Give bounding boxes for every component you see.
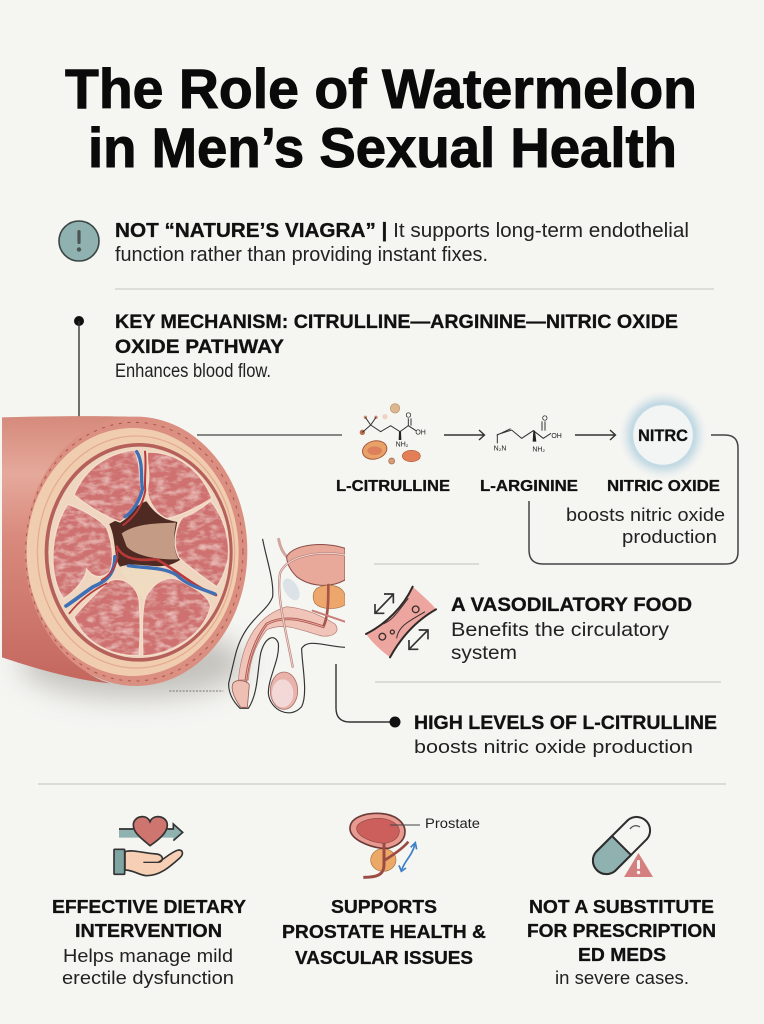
molecule labels: [336, 478, 720, 495]
text block: vasodilatory food: system: [451, 642, 517, 664]
text block: not nature's viagra: function rather than providing instant fixes.: [115, 244, 488, 266]
glans: [232, 681, 249, 707]
text block: not a substitute: [527, 896, 716, 988]
fibre layer: [37, 436, 235, 668]
text block: key mechanism: Enhances blood flow.: [115, 360, 271, 382]
text block: prostate health: SUPPORTS: [331, 896, 437, 917]
cylinder body: [2, 416, 143, 683]
icon: prostate: [350, 813, 480, 877]
text block: effective dietary intervention: Helps manage mild: [63, 945, 233, 966]
molecule labels: L-CITRULLINE: [336, 478, 450, 495]
molecule: L-citrulline: [360, 402, 426, 464]
text block: effective dietary intervention: EFFECTIVE DIETARY: [52, 896, 247, 917]
text block: key mechanism: OXIDE PATHWAY: [115, 336, 284, 358]
title: The Role of Watermelon: [65, 57, 697, 120]
body outline: [229, 539, 345, 713]
blood vessels: [66, 452, 216, 613]
molecule labels: NITRIC OXIDE: [607, 478, 720, 495]
connector: cross section to molecules: [197, 434, 342, 436]
title: in Men’s Sexual Health: [88, 116, 677, 179]
dashed rim marks: [26, 422, 243, 681]
molecule labels: L-ARGININE: [480, 478, 578, 495]
shadow: [20, 628, 247, 698]
connector: key mechanism to cross section: [74, 316, 84, 418]
pubic bone: [283, 578, 300, 600]
text block: boosts nitric oxide production: boosts nitric oxide: [566, 505, 725, 525]
pale layer: [27, 428, 239, 676]
text block: not nature's viagra: [115, 220, 689, 266]
molecule: L-citrulline: NH₂: [396, 442, 409, 449]
text block: not a substitute: in severe cases.: [555, 967, 689, 988]
molecule: L-arginine: NH₂: [532, 446, 545, 453]
vas deferens: [279, 553, 345, 667]
text block: vasodilatory food: A VASODILATORY FOOD: [451, 594, 692, 616]
outer wall: [25, 417, 247, 686]
inner membrane: [48, 447, 230, 658]
text block: high levels of l-citrulline: [414, 712, 717, 757]
illustration: tissue cross section: [2, 416, 247, 698]
text block: effective dietary intervention: erectile dysfunction: [62, 967, 234, 988]
text block: prostate health: PROSTATE HEALTH &: [282, 921, 486, 942]
icon: prostate: Prostate: [425, 816, 480, 831]
icon: exclamation alert: [59, 221, 99, 261]
rectum stripes: [313, 611, 345, 622]
illustration: male anatomy diagram: [169, 539, 345, 713]
dotted pointer: [169, 690, 223, 692]
text block: prostate health: [282, 896, 486, 968]
dark ring: [45, 443, 233, 662]
text block: boosts nitric oxide production: [566, 505, 725, 547]
urethra: [244, 585, 328, 707]
central cavity: [109, 502, 180, 567]
icon: nitric oxide glow: [619, 391, 707, 479]
text block: effective dietary intervention: [52, 896, 247, 988]
arrow: arginine to nitric oxide: [575, 430, 616, 440]
ureter: [279, 539, 287, 557]
shaft: [238, 607, 337, 680]
text block: prostate health: VASCULAR ISSUES: [295, 947, 473, 968]
text block: not a substitute: NOT A SUBSTITUTE: [529, 896, 714, 917]
molecule: L-arginine: N₂N: [494, 446, 506, 453]
text block: boosts nitric oxide production: production: [622, 527, 717, 547]
text block: effective dietary intervention: INTERVENTION: [75, 920, 222, 941]
text block: high levels of l-citrulline: boosts nitric oxide production: [414, 736, 693, 757]
icon: pill with warning: [593, 817, 653, 877]
text block: vasodilatory food: [451, 594, 692, 664]
bladder: [287, 545, 345, 585]
molecule: L-arginine: [494, 414, 562, 453]
molecule: L-citrulline: O: [406, 410, 412, 419]
text block: key mechanism: KEY MECHANISM: CITRULLINE—ARGININE—NITRIC OXIDE: [115, 311, 678, 333]
icon: vasodilation vessel: [366, 587, 436, 657]
bracket connector: [529, 435, 738, 564]
text block: not a substitute: ED MEDS: [578, 944, 666, 965]
tissue lobes: [53, 450, 229, 656]
icon: nitric oxide glow: NITRC: [638, 426, 688, 445]
title: [65, 57, 697, 179]
arrow: citrulline to arginine: [444, 430, 484, 440]
testis: [270, 672, 298, 709]
molecule: L-arginine: OH: [551, 433, 562, 440]
prostate: [313, 585, 345, 609]
icon: heart over hand: [114, 817, 183, 876]
text block: vasodilatory food: Benefits the circulatory: [451, 619, 669, 641]
molecule: L-arginine: O: [542, 414, 548, 423]
text block: not nature's viagra: NOT “NATURE’S VIAGRA” | It supports long-term endothelial: [115, 220, 689, 242]
connector: anatomy to high levels: [336, 664, 400, 728]
text block: key mechanism: [115, 311, 678, 382]
molecule: L-citrulline: OH: [415, 430, 426, 437]
text block: high levels of l-citrulline: HIGH LEVELS OF L-CITRULLINE: [414, 712, 717, 734]
text block: not a substitute: FOR PRESCRIPTION: [527, 920, 716, 941]
